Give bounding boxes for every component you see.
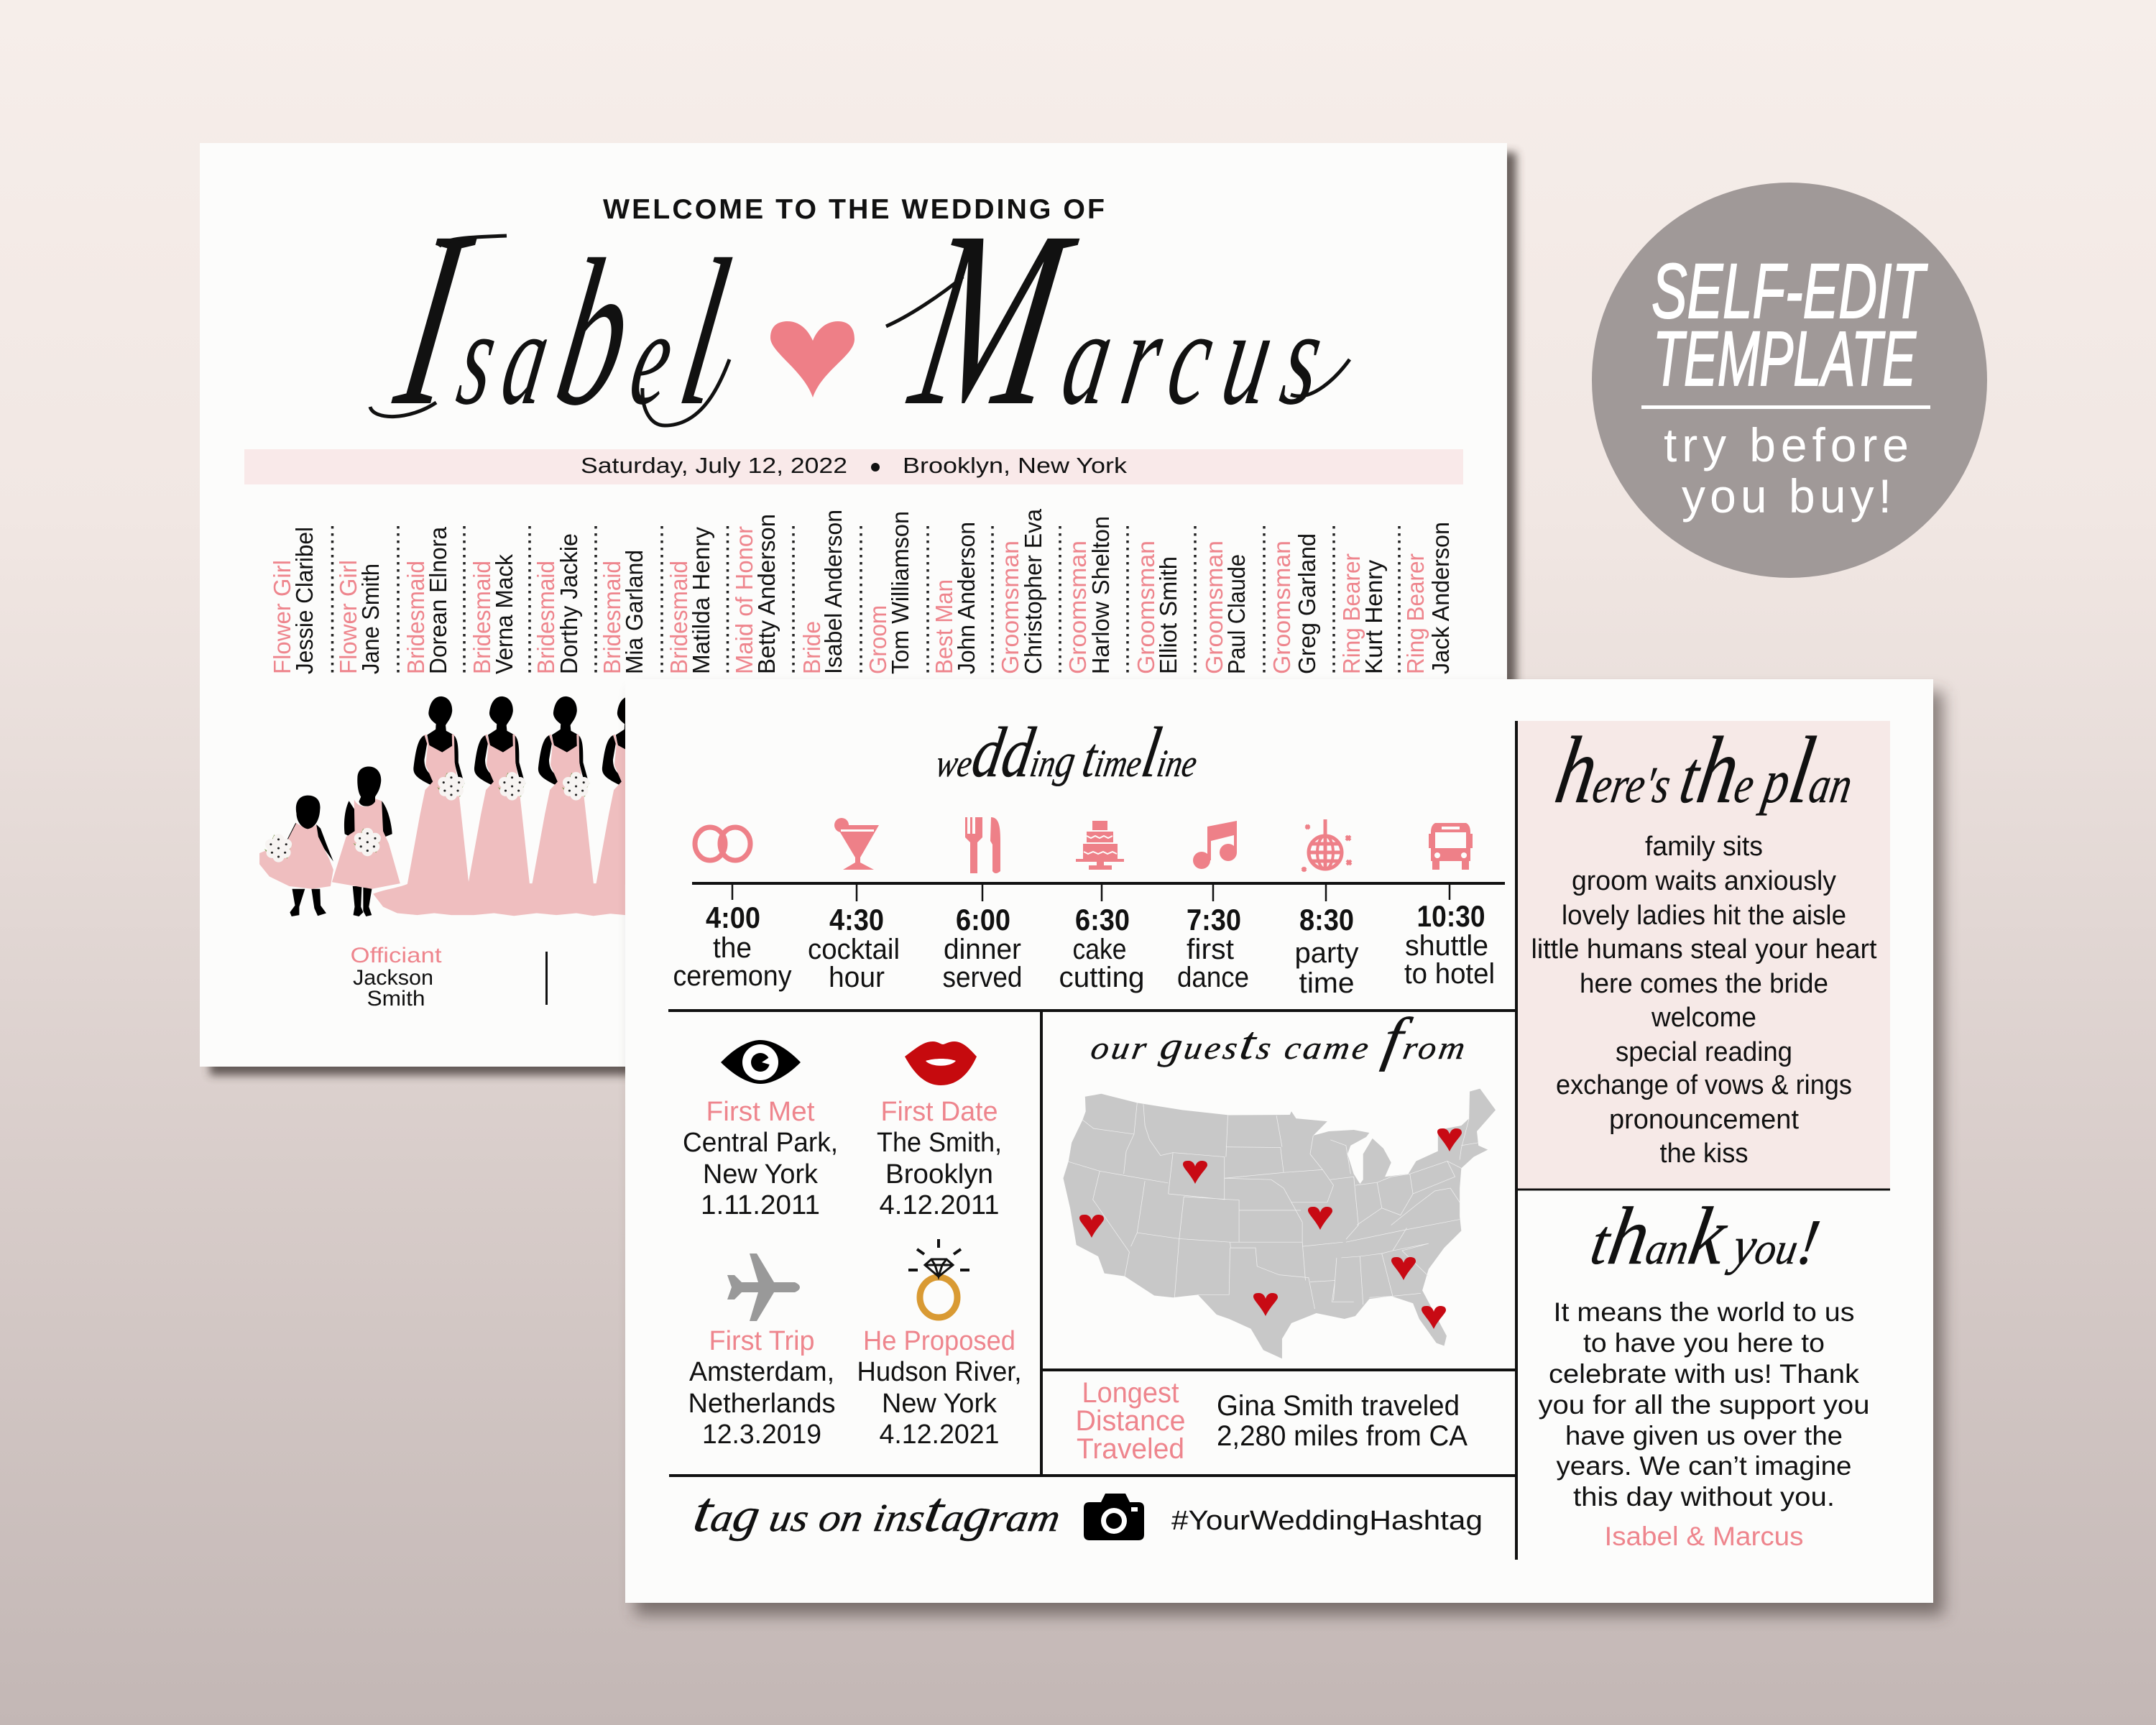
- wedding party names list: Elliot Smith: [1155, 556, 1181, 674]
- heading: our guests came from: our guests came from: [1087, 1006, 1475, 1072]
- milestone: first date: 4.12.2011: [880, 1190, 999, 1220]
- icon: airplane: [727, 1254, 800, 1321]
- panel: here's the plan: family sits: [1645, 832, 1763, 862]
- flower girl figure two: [332, 766, 400, 916]
- wedding party names list: Greg Garland: [1294, 533, 1320, 674]
- panel: thank you: celebrate with us! Thank: [1549, 1359, 1860, 1389]
- panel: thank you: to have you here to: [1583, 1328, 1825, 1358]
- milestone: first trip: Amsterdam,: [689, 1357, 834, 1387]
- milestone: first trip: Netherlands: [688, 1389, 835, 1419]
- map: United States with guest hearts: [1063, 1089, 1496, 1358]
- timeline entries: ceremony: [673, 960, 792, 992]
- panel: back card, wedding program: [200, 143, 1516, 1075]
- wedding party names list: Bridesmaid: [402, 561, 429, 674]
- panel: thank you: years. We can’t imagine: [1557, 1451, 1851, 1481]
- wedding party names list: Groomsman: [1201, 540, 1227, 674]
- panel: thank you: It means the world to us: [1554, 1297, 1854, 1327]
- timeline entries: first: [1187, 934, 1234, 965]
- heading: welcome line: WELCOME TO THE WEDDING OF: [603, 194, 1107, 225]
- panel: thank you: have given us over the: [1565, 1421, 1843, 1450]
- milestone: first met: First Met: [706, 1097, 815, 1127]
- bridesmaid figures: [407, 696, 658, 885]
- milestone: first met: Central Park,: [683, 1128, 838, 1158]
- milestone: first met: 1.11.2011: [701, 1190, 820, 1220]
- wedding party names list: Isabel Anderson: [820, 510, 847, 674]
- milestone: he proposed: [857, 1239, 1022, 1450]
- icon: shuttle bus: [1429, 823, 1473, 870]
- timeline entries: [673, 899, 1495, 999]
- wedding party names list: John Anderson: [953, 522, 980, 674]
- icon: diamond ring: [908, 1239, 969, 1317]
- milestone: first met: New York: [703, 1159, 819, 1190]
- wedding party names list: Dorthy Jackie: [556, 533, 582, 674]
- officiant credit: [351, 944, 442, 1011]
- timeline entries: the: [713, 932, 752, 964]
- panel: pink background for the plan: [1518, 721, 1890, 1190]
- icon: eye: [721, 1040, 801, 1084]
- badge: self-edit template: [1592, 183, 1987, 578]
- wedding party names list: Bride: [798, 621, 825, 674]
- panel: here's the plan: here comes the bride: [1580, 969, 1828, 999]
- milestone: he proposed: He Proposed: [863, 1326, 1015, 1356]
- wedding party names list: Tom Williamson: [887, 511, 913, 674]
- milestone: he proposed: Hudson River,: [857, 1357, 1022, 1387]
- hearts on guest locations: [1079, 1128, 1462, 1329]
- icon: pink heart: [770, 321, 854, 397]
- timeline entries: 6:00: [956, 903, 1010, 937]
- wedding party names list: Groomsman: [1268, 540, 1295, 674]
- callout: longest distance traveled: [1075, 1377, 1468, 1465]
- wedding party names list: Best Man: [931, 579, 957, 674]
- milestone: first trip: First Trip: [709, 1326, 815, 1356]
- callout: longest distance traveled: Longest: [1082, 1377, 1179, 1409]
- wedding party names list: Verna Mack: [491, 554, 517, 674]
- illustration: bridal party silhouettes: [259, 696, 658, 916]
- timeline entries: 7:30: [1187, 903, 1241, 937]
- panel: thank you: [1538, 1191, 1870, 1551]
- milestone: first date: The Smith,: [877, 1128, 1002, 1158]
- wedding party names list: Bridesmaid: [665, 561, 692, 674]
- panel: thank you: you for all the support you: [1538, 1390, 1870, 1420]
- title: couple names: Marcus: [895, 179, 1366, 458]
- badge: self-edit template: TEMPLATE: [1653, 315, 1917, 402]
- milestone: first date: [877, 1041, 1002, 1220]
- timeline entries: dance: [1177, 962, 1249, 993]
- timeline entries: 10:30: [1417, 899, 1485, 933]
- milestone: first trip: 12.3.2019: [702, 1420, 821, 1450]
- footer: instagram tag: #YourWeddingHashtag: [1171, 1506, 1483, 1536]
- milestone: first date: Brooklyn: [885, 1159, 993, 1190]
- timeline entries: dinner: [944, 934, 1021, 965]
- wedding party names list: Jessie Claribel: [291, 527, 318, 674]
- icon: disco ball: [1302, 819, 1351, 871]
- panel: thank you: this day without you.: [1573, 1482, 1835, 1512]
- callout: longest distance traveled: Traveled: [1077, 1433, 1184, 1465]
- wedding party names list: [269, 508, 1454, 674]
- callout: longest distance traveled: Distance: [1075, 1405, 1186, 1437]
- timeline entries: to hotel: [1404, 958, 1495, 990]
- date and location band: Saturday, July 12, 2022: [581, 453, 847, 478]
- panel: thank you: Isabel & Marcus: [1604, 1522, 1804, 1551]
- panel: here's the plan: here's the plan: [1549, 718, 1864, 824]
- icon: wedding rings: [695, 827, 750, 860]
- timeline entries: cutting: [1059, 962, 1144, 993]
- milestone: first date: First Date: [881, 1097, 998, 1127]
- icon: tiered cake: [1076, 821, 1124, 870]
- footer: instagram tag: [689, 1481, 1483, 1544]
- icon: camera: [1084, 1494, 1144, 1540]
- timeline entries: shuttle: [1405, 930, 1488, 962]
- date and location band: [244, 449, 1463, 484]
- footer: instagram tag: tag us on instagram: [689, 1481, 1067, 1544]
- officiant credit: Jackson: [353, 966, 433, 990]
- milestone: first trip: [688, 1254, 835, 1450]
- timeline entries: party: [1295, 937, 1358, 969]
- wedding party names list: Christopher Eva: [1020, 508, 1046, 674]
- panel: here's the plan: special reading: [1616, 1037, 1792, 1067]
- wedding party names list: Bridesmaid: [533, 561, 559, 674]
- timeline entries: 8:30: [1299, 903, 1354, 937]
- wedding party names list: Flower Girl: [269, 560, 295, 674]
- badge: self-edit template: you buy!: [1682, 469, 1892, 523]
- timeline entries: served: [943, 962, 1022, 993]
- wedding party names list: Flower Girl: [335, 560, 361, 674]
- panel: here's the plan: lovely ladies hit the aisle: [1562, 901, 1846, 931]
- wedding party names list: Jane Smith: [357, 564, 384, 674]
- wedding party names list: Groomsman: [1064, 540, 1091, 674]
- icon: red lips: [905, 1041, 977, 1085]
- icon: fork and knife: [965, 817, 1000, 873]
- wedding party names list: Bridesmaid: [469, 561, 495, 674]
- wedding party names list: Bridesmaid: [599, 561, 625, 674]
- icon: cocktail glass: [834, 818, 879, 870]
- badge: self-edit template: SELF-EDIT: [1651, 247, 1928, 334]
- timeline icons: [695, 817, 1473, 873]
- wedding party names list: Kurt Henry: [1360, 559, 1387, 674]
- panel: here's the plan: welcome: [1651, 1003, 1756, 1033]
- callout: longest distance traveled: Gina Smith traveled: [1217, 1390, 1460, 1422]
- timeline axis with ticks: [692, 882, 1505, 885]
- officiant credit: Smith: [367, 987, 425, 1011]
- flower girl figure one: [259, 796, 333, 916]
- map shape and state lines: [1063, 1089, 1496, 1358]
- timeline entries: hour: [829, 962, 885, 993]
- wedding party names list: Groom: [865, 605, 891, 674]
- wedding party names list: Ring Bearer: [1338, 553, 1365, 674]
- callout: longest distance traveled: 2,280 miles from CA: [1217, 1420, 1468, 1452]
- wedding party names list: Mia Garland: [621, 550, 648, 674]
- wedding party names list: Jack Anderson: [1427, 522, 1454, 674]
- panel: here's the plan: [1531, 718, 1877, 1169]
- structural rules: [668, 721, 1890, 1560]
- timeline entries: 4:30: [829, 903, 884, 937]
- panel: here's the plan: exchange of vows & rings: [1556, 1070, 1852, 1100]
- wedding party names list: Groomsman: [1133, 540, 1159, 674]
- title: couple names: [370, 179, 1366, 459]
- badge: self-edit template: try before: [1664, 418, 1909, 472]
- wedding party names list: Betty Anderson: [753, 514, 780, 674]
- wedding party names list: Groomsman: [997, 540, 1023, 674]
- wedding party names list: Matilda Henry: [688, 526, 714, 674]
- timeline entries: cake: [1072, 934, 1127, 965]
- milestone: first met: [683, 1040, 838, 1220]
- panel: here's the plan: pronouncement: [1609, 1105, 1799, 1135]
- timeline entries: time: [1299, 967, 1354, 999]
- heading: wedding timeline: wedding timeline: [931, 712, 1205, 792]
- officiant credit: Officiant: [351, 944, 442, 967]
- date and location band: Brooklyn, New York: [903, 453, 1128, 478]
- timeline entries: 6:30: [1075, 903, 1130, 937]
- wedding party names list: Maid of Honor: [731, 526, 757, 674]
- timeline entries: 4:00: [706, 901, 760, 934]
- timeline entries: cocktail: [808, 934, 900, 965]
- panel: here's the plan: groom waits anxiously: [1572, 866, 1836, 896]
- panel: here's the plan: the kiss: [1660, 1138, 1748, 1169]
- title: couple names: Isabel: [379, 180, 761, 459]
- panel: here's the plan: little humans steal your heart: [1531, 934, 1877, 965]
- panel: thank you: thank you!: [1585, 1191, 1828, 1282]
- wedding party names list: Harlow Shelton: [1087, 516, 1114, 674]
- panel: front card, reception details: [625, 679, 1943, 1615]
- shared dress train: [373, 883, 625, 916]
- wedding party names list: Dorean Elnora: [425, 526, 451, 674]
- wedding party names list: Paul Claude: [1223, 554, 1250, 674]
- milestone: he proposed: 4.12.2021: [880, 1420, 999, 1450]
- wedding party names list: Ring Bearer: [1402, 553, 1429, 674]
- milestone: he proposed: New York: [882, 1389, 998, 1419]
- icon: music note: [1193, 821, 1237, 869]
